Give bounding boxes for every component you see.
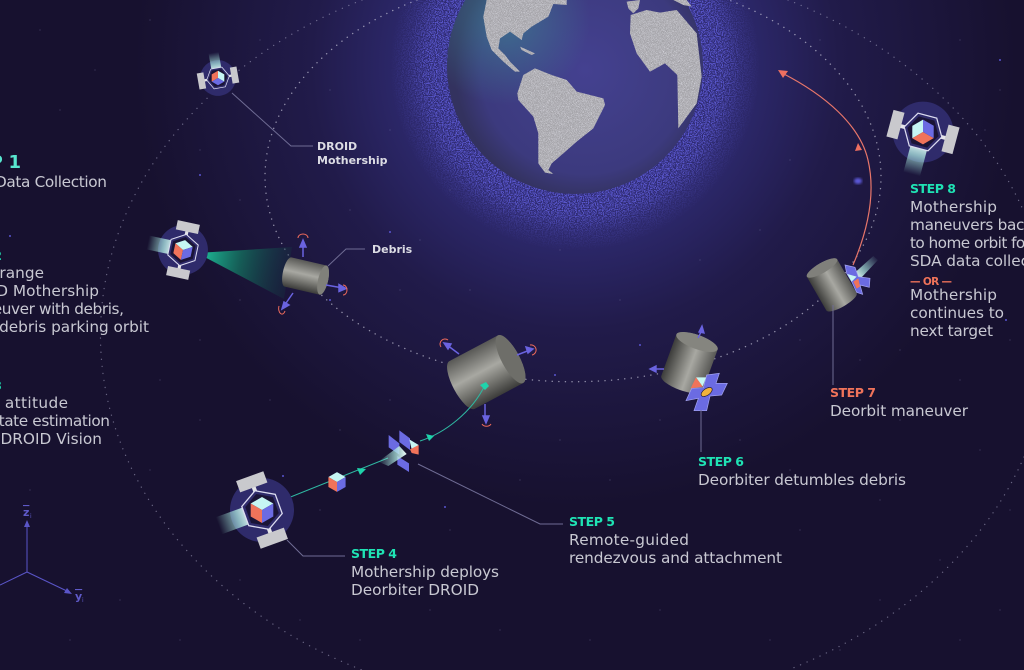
step 1 text: [0, 152, 107, 191]
leader: Debris: [328, 249, 365, 266]
step 8 text: continues to: [910, 304, 1004, 322]
coordinate axes: z: [23, 506, 29, 519]
debris 2 arrows: [440, 339, 536, 426]
debris 3 arrows: [650, 326, 704, 372]
step 4 text: STEP 4: [351, 546, 397, 561]
leader: DROID Mothership: [232, 93, 313, 146]
label: DROID Mothership: DROID: [317, 140, 357, 153]
cube: [172, 238, 194, 262]
leader: step 7: [832, 305, 834, 385]
step 6 text: [698, 454, 906, 489]
step 5 text: [569, 514, 782, 567]
sensing beam: [197, 247, 292, 299]
deorbit trajectory: [778, 70, 871, 265]
step 5 text: Remote-guided: [569, 531, 689, 549]
deorbiter: step 7: [845, 256, 878, 294]
satellite: DROID Mothership: [194, 49, 241, 99]
deorbiter: step 6: [686, 373, 727, 411]
cube: [251, 497, 273, 523]
earth disc: [447, 0, 703, 194]
step 7 text: Deorbit maneuver: [830, 402, 969, 420]
coordinate axes: i: [82, 597, 84, 604]
continents: [483, 0, 702, 174]
inner dotted orbit: [265, 0, 881, 382]
cube: [209, 69, 227, 87]
debris halo: [390, 0, 760, 251]
debris cylinder 4: [804, 255, 859, 315]
step 3 text: [0, 378, 110, 448]
atmospheric teal glow: [447, 0, 703, 194]
step 8 text: — OR —: [910, 276, 952, 288]
step 7 text: STEP 7: [830, 385, 876, 400]
coordinate axes: [0, 506, 84, 604]
rendezvous trajectory: [278, 382, 489, 502]
leader: step 4: [287, 540, 345, 556]
step 4 text: [351, 546, 499, 599]
debris cylinder 3: [659, 328, 720, 397]
step 6 text: Deorbiter detumbles debris: [698, 471, 906, 489]
step 4 text: Deorbiter DROID: [351, 581, 479, 599]
debris rotation arrows: [279, 234, 347, 314]
step 5 text: rendezvous and attachment: [569, 549, 782, 567]
step 8 text: [910, 181, 1024, 340]
leader: step 5: [418, 464, 563, 524]
step 2 text: [0, 248, 149, 336]
step 4 text: Mothership deploys: [351, 563, 499, 581]
satellite: step 4 mothership: [206, 465, 304, 560]
debris cylinder 2: [441, 331, 531, 413]
step 8 text: Mothership: [910, 286, 997, 304]
cube: [907, 117, 939, 147]
step 8 text: next target: [910, 322, 993, 340]
earth: [390, 0, 760, 251]
label: Debris: Debris: [372, 243, 413, 256]
coordinate axes: i: [30, 513, 32, 520]
debris cylinder 1: [280, 256, 331, 296]
step 6 text: STEP 6: [698, 454, 744, 469]
step 8 text: STEP 8: [910, 181, 956, 196]
free-flying deorbiter cube: [328, 472, 346, 492]
step 7 text: [830, 385, 969, 420]
coordinate axes: y: [75, 590, 82, 603]
deorbiter: step 5: [378, 430, 419, 472]
satellite: SDA inspection: [142, 215, 213, 283]
leader: step 6: [700, 410, 702, 452]
label: DROID Mothership: Mothership: [317, 154, 388, 167]
satellite: step 8 mothership: [879, 94, 964, 183]
step 5 text: STEP 5: [569, 514, 615, 529]
step 8 text: Mothership: [910, 198, 997, 216]
